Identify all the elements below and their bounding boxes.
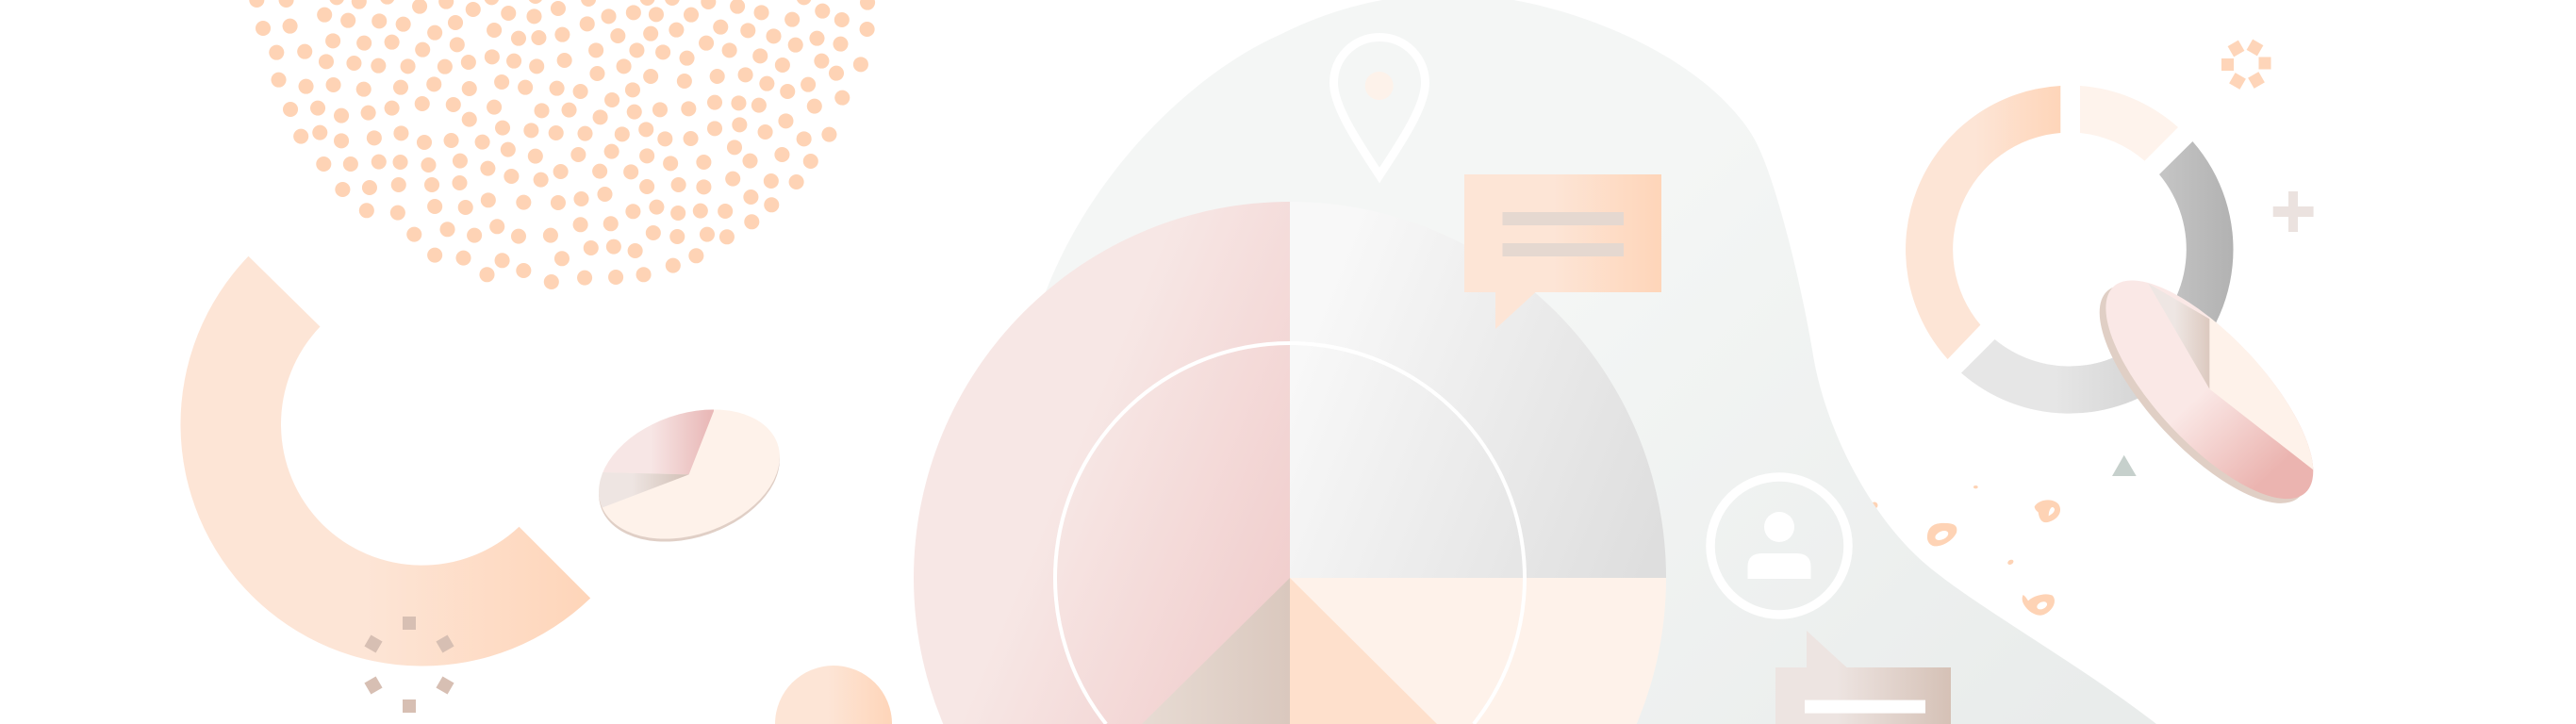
scattered peach blobs	[1927, 485, 2060, 616]
speech bubble, beige	[1775, 631, 1951, 724]
six small squares ring, top right	[2221, 40, 2271, 90]
white ring on large circle	[1055, 343, 1525, 724]
dot field	[249, 0, 875, 289]
pie wedge: beige lower centre left	[1142, 578, 1290, 724]
small scatter dot behind blob	[1871, 502, 1878, 509]
large circle pie	[914, 202, 1666, 724]
pie quadrant: grey upper right	[1405, 292, 1666, 578]
six small squares ring, left	[364, 617, 454, 713]
pie wedge: peach lower centre right	[1290, 578, 1437, 724]
icon: user in circle	[1710, 477, 1848, 615]
large tilted pie	[2099, 281, 2314, 503]
pie quadrant: cream lower right	[1290, 578, 1666, 724]
icon: location pin	[1333, 38, 1426, 175]
grey background blob	[1037, 0, 2156, 724]
large peach arc	[180, 256, 590, 666]
donut chart	[1906, 86, 2233, 414]
small tilted pie	[599, 409, 780, 541]
pie quadrant: pink left half	[914, 202, 1290, 724]
plus sign	[2273, 191, 2314, 232]
triangle	[2112, 455, 2137, 476]
bottom peach circle	[775, 666, 892, 724]
speech bubble, peach	[1464, 174, 1661, 329]
